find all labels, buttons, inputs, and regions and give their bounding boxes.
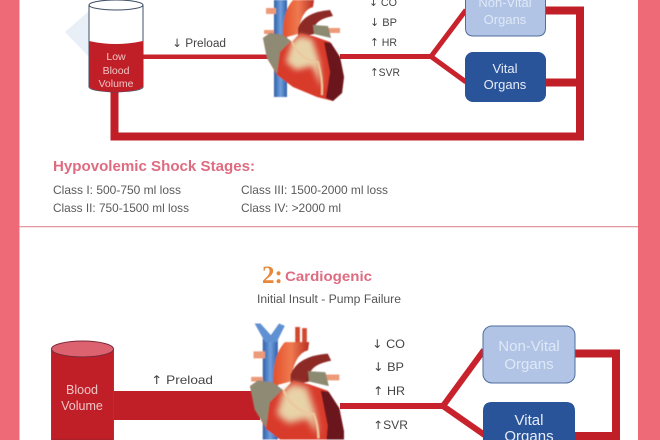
preload label: ↑ Preload xyxy=(151,373,213,387)
hemodynamic labels: ↑ HR xyxy=(373,384,405,398)
text block: stage classes: Class III: 1500-2000 ml loss xyxy=(241,183,388,197)
icon: blood beaker xyxy=(89,0,143,92)
subtitle: initial insult: Initial Insult - Pump Failure xyxy=(257,294,401,306)
hemodynamic labels: ↓ BP xyxy=(373,360,404,374)
return vessel xyxy=(575,354,616,436)
box: vital organs: Vital xyxy=(492,61,518,76)
hemodynamic labels xyxy=(372,337,408,432)
text block: stage classes: Class I: 500-750 ml loss xyxy=(53,183,181,197)
box: non-vital organs: Organs xyxy=(484,12,527,27)
box: non-vital organs: Organs xyxy=(504,356,554,373)
text block: stage classes: Class IV: >2000 ml xyxy=(241,201,341,215)
heading: hypovolemic stages: Hypovolemic Shock Stages: xyxy=(53,158,255,175)
icon: blood beaker: Low xyxy=(106,51,126,63)
text block: stage classes: Class II: 750-1500 ml loss xyxy=(53,201,189,215)
preload vessel xyxy=(143,54,268,59)
hemodynamic labels: ↑SVR xyxy=(370,66,400,79)
outflow vessel with branches xyxy=(340,350,486,436)
box: vital organs: Vital xyxy=(515,412,543,429)
icon: heart xyxy=(250,324,344,440)
icon: blood cylinder xyxy=(52,341,114,440)
icon: heart xyxy=(263,0,344,101)
section divider xyxy=(19,226,638,227)
heading: cardiogenic: 2: xyxy=(262,262,283,289)
right side bar xyxy=(638,0,660,440)
heading: cardiogenic xyxy=(262,262,372,289)
text block: stage classes xyxy=(53,183,388,215)
icon: blood beaker: Volume xyxy=(98,78,134,90)
left side bar xyxy=(0,0,20,440)
icon: blood cylinder: Blood xyxy=(66,383,98,397)
box: non-vital organs xyxy=(466,0,546,36)
box: vital organs: Organs xyxy=(484,77,527,92)
box: vital organs xyxy=(465,52,546,102)
hemodynamic labels: ↑SVR xyxy=(373,418,408,432)
icon: blood cylinder: Volume xyxy=(61,399,103,413)
heading: cardiogenic: Cardiogenic xyxy=(285,268,372,284)
hemodynamic labels: ↑ HR xyxy=(370,36,397,49)
preload label: ↓ Preload xyxy=(172,36,226,50)
icon: blood beaker: Blood xyxy=(103,65,130,77)
hemodynamic labels xyxy=(369,0,400,79)
panel: hypovolemic diagram xyxy=(65,0,580,136)
hemodynamic labels: ↓ CO xyxy=(372,337,405,351)
return vessel xyxy=(114,10,580,136)
box: non-vital organs xyxy=(483,326,575,383)
wide preload vessel xyxy=(114,391,260,420)
outflow vessel with branches xyxy=(340,10,466,82)
hemodynamic labels: ↓ BP xyxy=(370,16,397,29)
decorative pale diamond xyxy=(65,10,90,58)
box: non-vital organs: Non-Vital xyxy=(498,338,560,355)
panel: cardiogenic diagram xyxy=(52,324,616,440)
box: vital organs xyxy=(483,402,575,440)
